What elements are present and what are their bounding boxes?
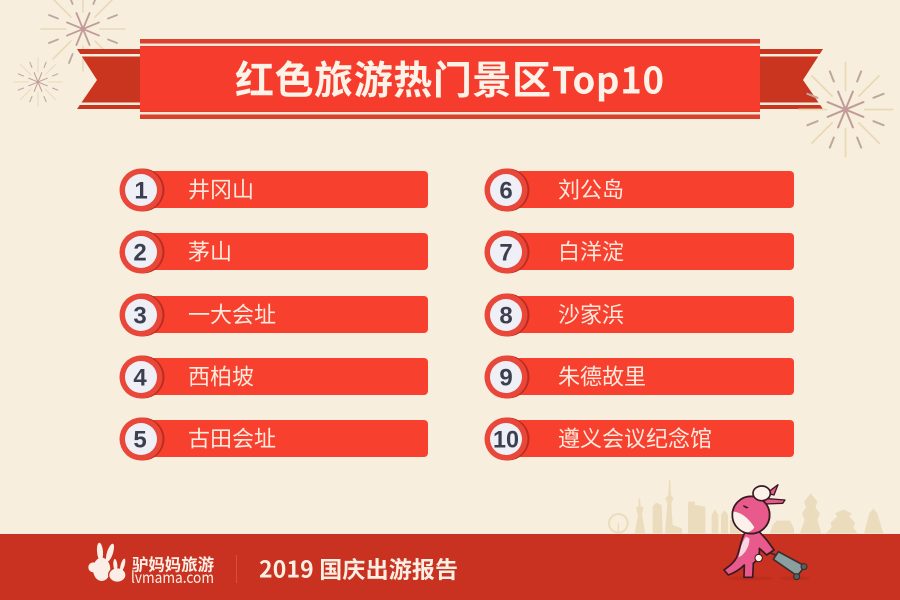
logo url: lvmama.com (131, 564, 214, 588)
list item 9: 朱德故里 (558, 360, 646, 392)
list item 2: 2 (133, 240, 147, 266)
body (724, 531, 774, 577)
list item 9 (484, 356, 794, 398)
icon: rabbits (88, 542, 126, 582)
list item 5 (120, 418, 428, 460)
list item 8: 8 (499, 302, 513, 330)
head (732, 496, 770, 534)
suitcase (767, 552, 807, 580)
ribbon tail right (760, 49, 823, 109)
mascot with suitcase (724, 485, 810, 580)
list item 3: 3 (133, 302, 147, 330)
list item 10: 遵义会议纪念馆 (558, 422, 712, 454)
list item 7: 7 (499, 240, 513, 266)
ribbon tail left (77, 49, 140, 109)
belly (738, 537, 749, 557)
list item 8 (484, 294, 794, 336)
list item 6 (484, 168, 794, 212)
list item 5: 5 (133, 426, 147, 454)
list item 1: 1 (134, 178, 148, 204)
list item 5: 古田会址 (188, 422, 276, 454)
ear and cap (763, 498, 785, 504)
report title: 2019 国庆出游报告 (259, 550, 458, 584)
title text: Top10 (552, 52, 664, 104)
icon: firework small left (14, 58, 62, 106)
list item 3 (120, 294, 428, 336)
list item 10: 10 (493, 426, 519, 454)
list item 7 (484, 230, 794, 274)
tail (755, 554, 762, 562)
icon: firework right (798, 62, 893, 157)
list item 7: 白洋淀 (558, 234, 624, 266)
icon: firework top left (41, 0, 125, 71)
list item 3: 一大会址 (188, 298, 276, 330)
list item 8: 沙家浜 (558, 298, 624, 330)
list item 1: 井冈山 (188, 172, 254, 204)
logo name: 驴妈妈旅游 (132, 552, 214, 576)
list item 2 (120, 230, 428, 274)
list item 1 (120, 168, 428, 212)
title text: 红色旅游热门景区 (235, 50, 551, 106)
banner body (140, 39, 760, 119)
list item 6: 6 (499, 178, 513, 204)
list item 6: 刘公岛 (558, 172, 624, 204)
list item 4 (120, 356, 428, 398)
shadow (727, 576, 773, 580)
brand logo (88, 542, 214, 588)
divider (236, 555, 237, 583)
bobble (753, 486, 770, 501)
title banner (77, 39, 823, 119)
city skyline (608, 480, 883, 534)
footer bar (0, 534, 900, 600)
list item 4: 4 (133, 364, 147, 392)
list item 9: 9 (499, 364, 513, 392)
list item 2: 茅山 (188, 234, 232, 266)
list item 4: 西柏坡 (188, 360, 254, 392)
list item 10 (484, 418, 794, 460)
